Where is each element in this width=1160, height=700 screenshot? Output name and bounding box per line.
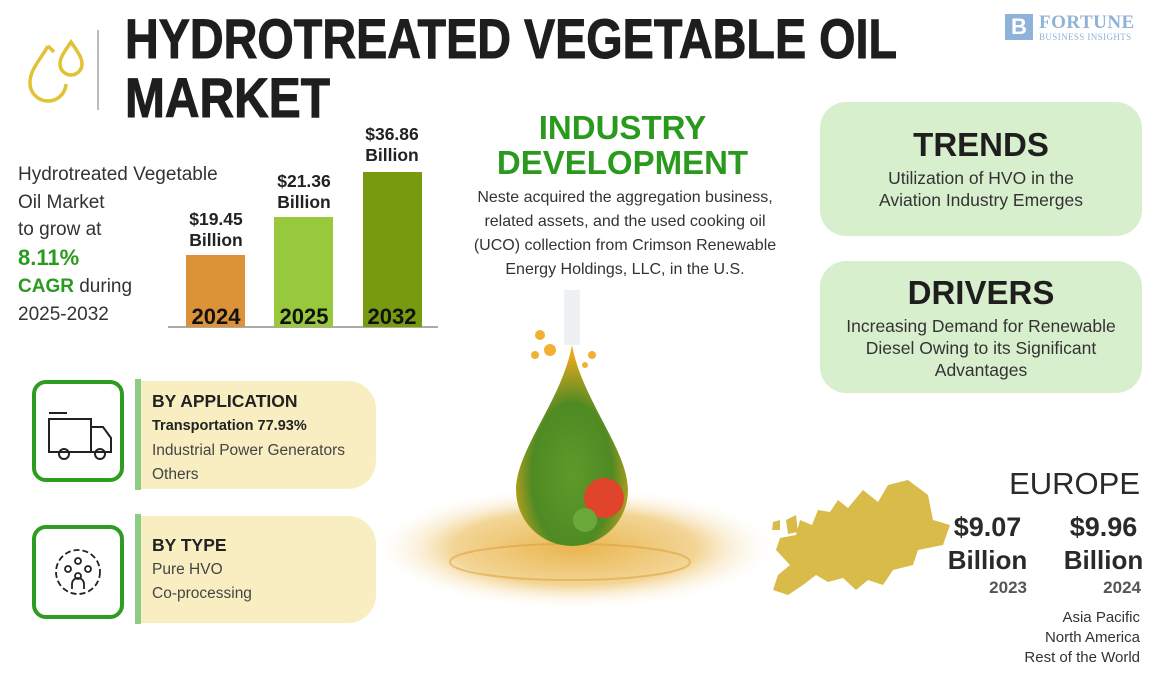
text: market growth: 2025-2032 (18, 304, 109, 324)
logo: BUSINESS INSIGHTS (1039, 32, 1132, 42)
title: MARKET (125, 66, 330, 129)
text: industry development (474, 189, 776, 278)
text: industry development: related assets, and the used cooking oil (484, 213, 766, 230)
text: market growth (18, 164, 218, 324)
bar chart: 2032 (368, 304, 416, 329)
heading: industry development: INDUSTRY (539, 109, 706, 146)
bar chart: Billion (277, 192, 331, 212)
panel: drivers (820, 261, 1142, 393)
panel: drivers: Increasing Demand for Renewable (846, 316, 1116, 336)
panel: trends: Utilization of HVO in the (888, 168, 1074, 188)
text: industry development: (UCO) collection from Crimson Renewable (474, 237, 776, 254)
stat: 2024 (1064, 512, 1143, 597)
panel: drivers: DRIVERS (908, 274, 1054, 311)
logo: B (1011, 14, 1027, 39)
panel: by type: BY TYPE (152, 535, 227, 555)
map: europe (772, 480, 950, 595)
stat: 2023: $9.07 (954, 512, 1021, 542)
stat: 2024: 2024 (1103, 578, 1141, 597)
divider (97, 30, 99, 110)
panel: by application: Industrial Power Generators (152, 442, 345, 459)
text: market growth: 8.11% (18, 244, 79, 270)
stat: 2024: Billion (1064, 545, 1143, 575)
panel: by application (32, 379, 376, 490)
illustration: oil drop with vegetables (393, 290, 758, 603)
bar chart: Billion (365, 145, 419, 165)
panel: trends: TRENDS (913, 126, 1049, 163)
text: industry development: Neste acquired the aggregation business, (477, 189, 773, 206)
text: other regions: Rest of the World (1024, 649, 1140, 666)
icon: gear with people (32, 525, 124, 619)
stat: 2024: $9.96 (1070, 512, 1137, 542)
heading: industry development: DEVELOPMENT (497, 144, 748, 181)
text: market growth: Hydrotreated Vegetable (18, 164, 218, 185)
icon: oil drops (28, 39, 84, 103)
bar chart: Billion (189, 230, 243, 250)
title (125, 7, 897, 129)
stat: 2023: Billion (948, 545, 1027, 575)
text: industry development: Energy Holdings, LLC, in the U.S. (505, 261, 745, 278)
bar chart: 2025 (280, 304, 328, 329)
panel: trends (820, 102, 1142, 236)
panel: by type: Co-processing (152, 585, 252, 602)
text: other regions (1024, 609, 1140, 666)
text: market growth: Oil Market (18, 192, 105, 212)
panel: by type (32, 514, 376, 624)
logo: FORTUNE (1039, 12, 1135, 33)
stat: 2023: 2023 (989, 578, 1027, 597)
bar chart: $36.86 (365, 124, 419, 144)
panel: drivers: Diesel Owing to its Significant (866, 338, 1096, 358)
bar chart (168, 124, 438, 329)
icon: truck (32, 380, 124, 482)
bar chart: $21.36 (277, 171, 331, 191)
panel: by application: Others (152, 466, 199, 483)
panel: by type: Pure HVO (152, 561, 223, 578)
bar chart: 2024 (192, 304, 240, 329)
panel: drivers: Advantages (935, 360, 1027, 380)
panel: by application: Transportation 77.93% (152, 418, 307, 434)
stat: 2023 (948, 512, 1027, 597)
text: other regions: Asia Pacific (1062, 609, 1140, 626)
text: other regions: North America (1045, 629, 1140, 646)
panel: by application: BY APPLICATION (152, 391, 298, 411)
text: market growth: to grow at (18, 219, 101, 240)
logo (1005, 12, 1135, 42)
text: market growth: CAGR during (18, 276, 132, 297)
heading: industry development (497, 109, 748, 181)
bar chart: $19.45 (189, 209, 243, 229)
heading: europe: EUROPE (1009, 466, 1140, 501)
panel: trends: Aviation Industry Emerges (879, 190, 1083, 210)
